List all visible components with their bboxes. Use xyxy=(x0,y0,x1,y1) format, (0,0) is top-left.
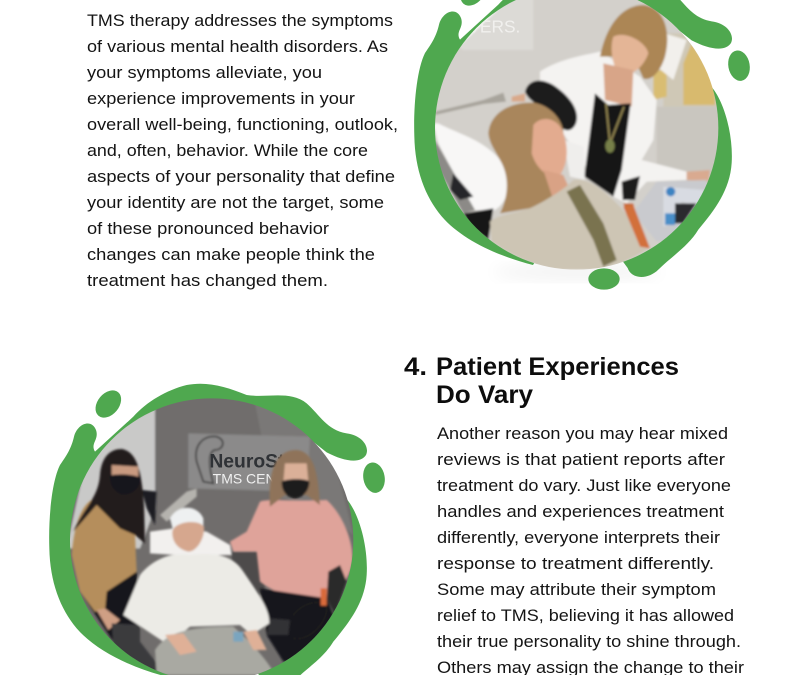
text block: patient experiences paragraph: Another reason you may hear mixed xyxy=(437,424,728,443)
heading: patient experiences do vary: Do Vary xyxy=(436,381,533,409)
text block: patient experiences paragraph: relief to TMS, believing it has allowed xyxy=(437,606,734,625)
text block: behavior changes paragraph: and, often, behavior. While the core xyxy=(87,141,368,160)
green blob frame xyxy=(414,0,752,290)
text block: behavior changes paragraph: of these pronounced behavior xyxy=(87,219,329,238)
text block: patient experiences paragraph: handles and experiences treatment xyxy=(437,502,724,521)
photo wall sign subtitle: TMS CENT xyxy=(213,470,285,486)
soft shadow under photo xyxy=(492,264,662,280)
text block: behavior changes paragraph: aspects of your personality that define xyxy=(87,167,395,186)
text block: behavior changes paragraph: overall well-being, functioning, outlook, xyxy=(87,115,398,134)
green blob frame xyxy=(49,384,387,675)
text block: behavior changes paragraph: treatment has changed them. xyxy=(87,271,328,290)
heading: patient experiences do vary: Patient Experiences xyxy=(436,353,679,381)
photo figures xyxy=(72,449,353,675)
photo background wall xyxy=(63,392,357,675)
photo blob: patient with two staff members xyxy=(49,384,387,675)
heading: patient experiences do vary xyxy=(436,353,679,409)
photo blob: clinician with patient xyxy=(414,0,752,290)
photo: clinician positioning TMS coil on patient xyxy=(430,0,723,270)
step number 4: 4. xyxy=(404,353,427,381)
text block: patient experiences paragraph: Some may attribute their symptom xyxy=(437,580,716,599)
text block: behavior changes paragraph: your identity are not the target, some xyxy=(87,193,384,212)
text block: behavior changes paragraph: experience improvements in your xyxy=(87,89,355,108)
text block: patient experiences paragraph: reviews is that patient reports after xyxy=(437,450,725,469)
text block: behavior changes paragraph xyxy=(87,11,398,290)
text block: patient experiences paragraph: differently, everyone interprets their xyxy=(437,528,720,547)
photo wall lettering: VERS. xyxy=(468,17,520,37)
text block: behavior changes paragraph: your symptoms alleviate, you xyxy=(87,63,322,82)
text block: behavior changes paragraph: TMS therapy addresses the symptoms xyxy=(87,11,393,30)
text block: patient experiences paragraph: treatment do vary. Just like everyone xyxy=(437,476,731,495)
photo: patient in TMS chair with staff xyxy=(63,392,357,675)
photo wall sign: NeuroSt xyxy=(209,452,285,473)
text block: patient experiences paragraph xyxy=(437,424,744,675)
text block: patient experiences paragraph: response to treatment differently. xyxy=(437,554,714,573)
text block: behavior changes paragraph: of various mental health disorders. As xyxy=(87,37,388,56)
text block: patient experiences paragraph: their true personality to shine through. xyxy=(437,632,741,651)
text block: behavior changes paragraph: changes can make people think the xyxy=(87,245,375,264)
